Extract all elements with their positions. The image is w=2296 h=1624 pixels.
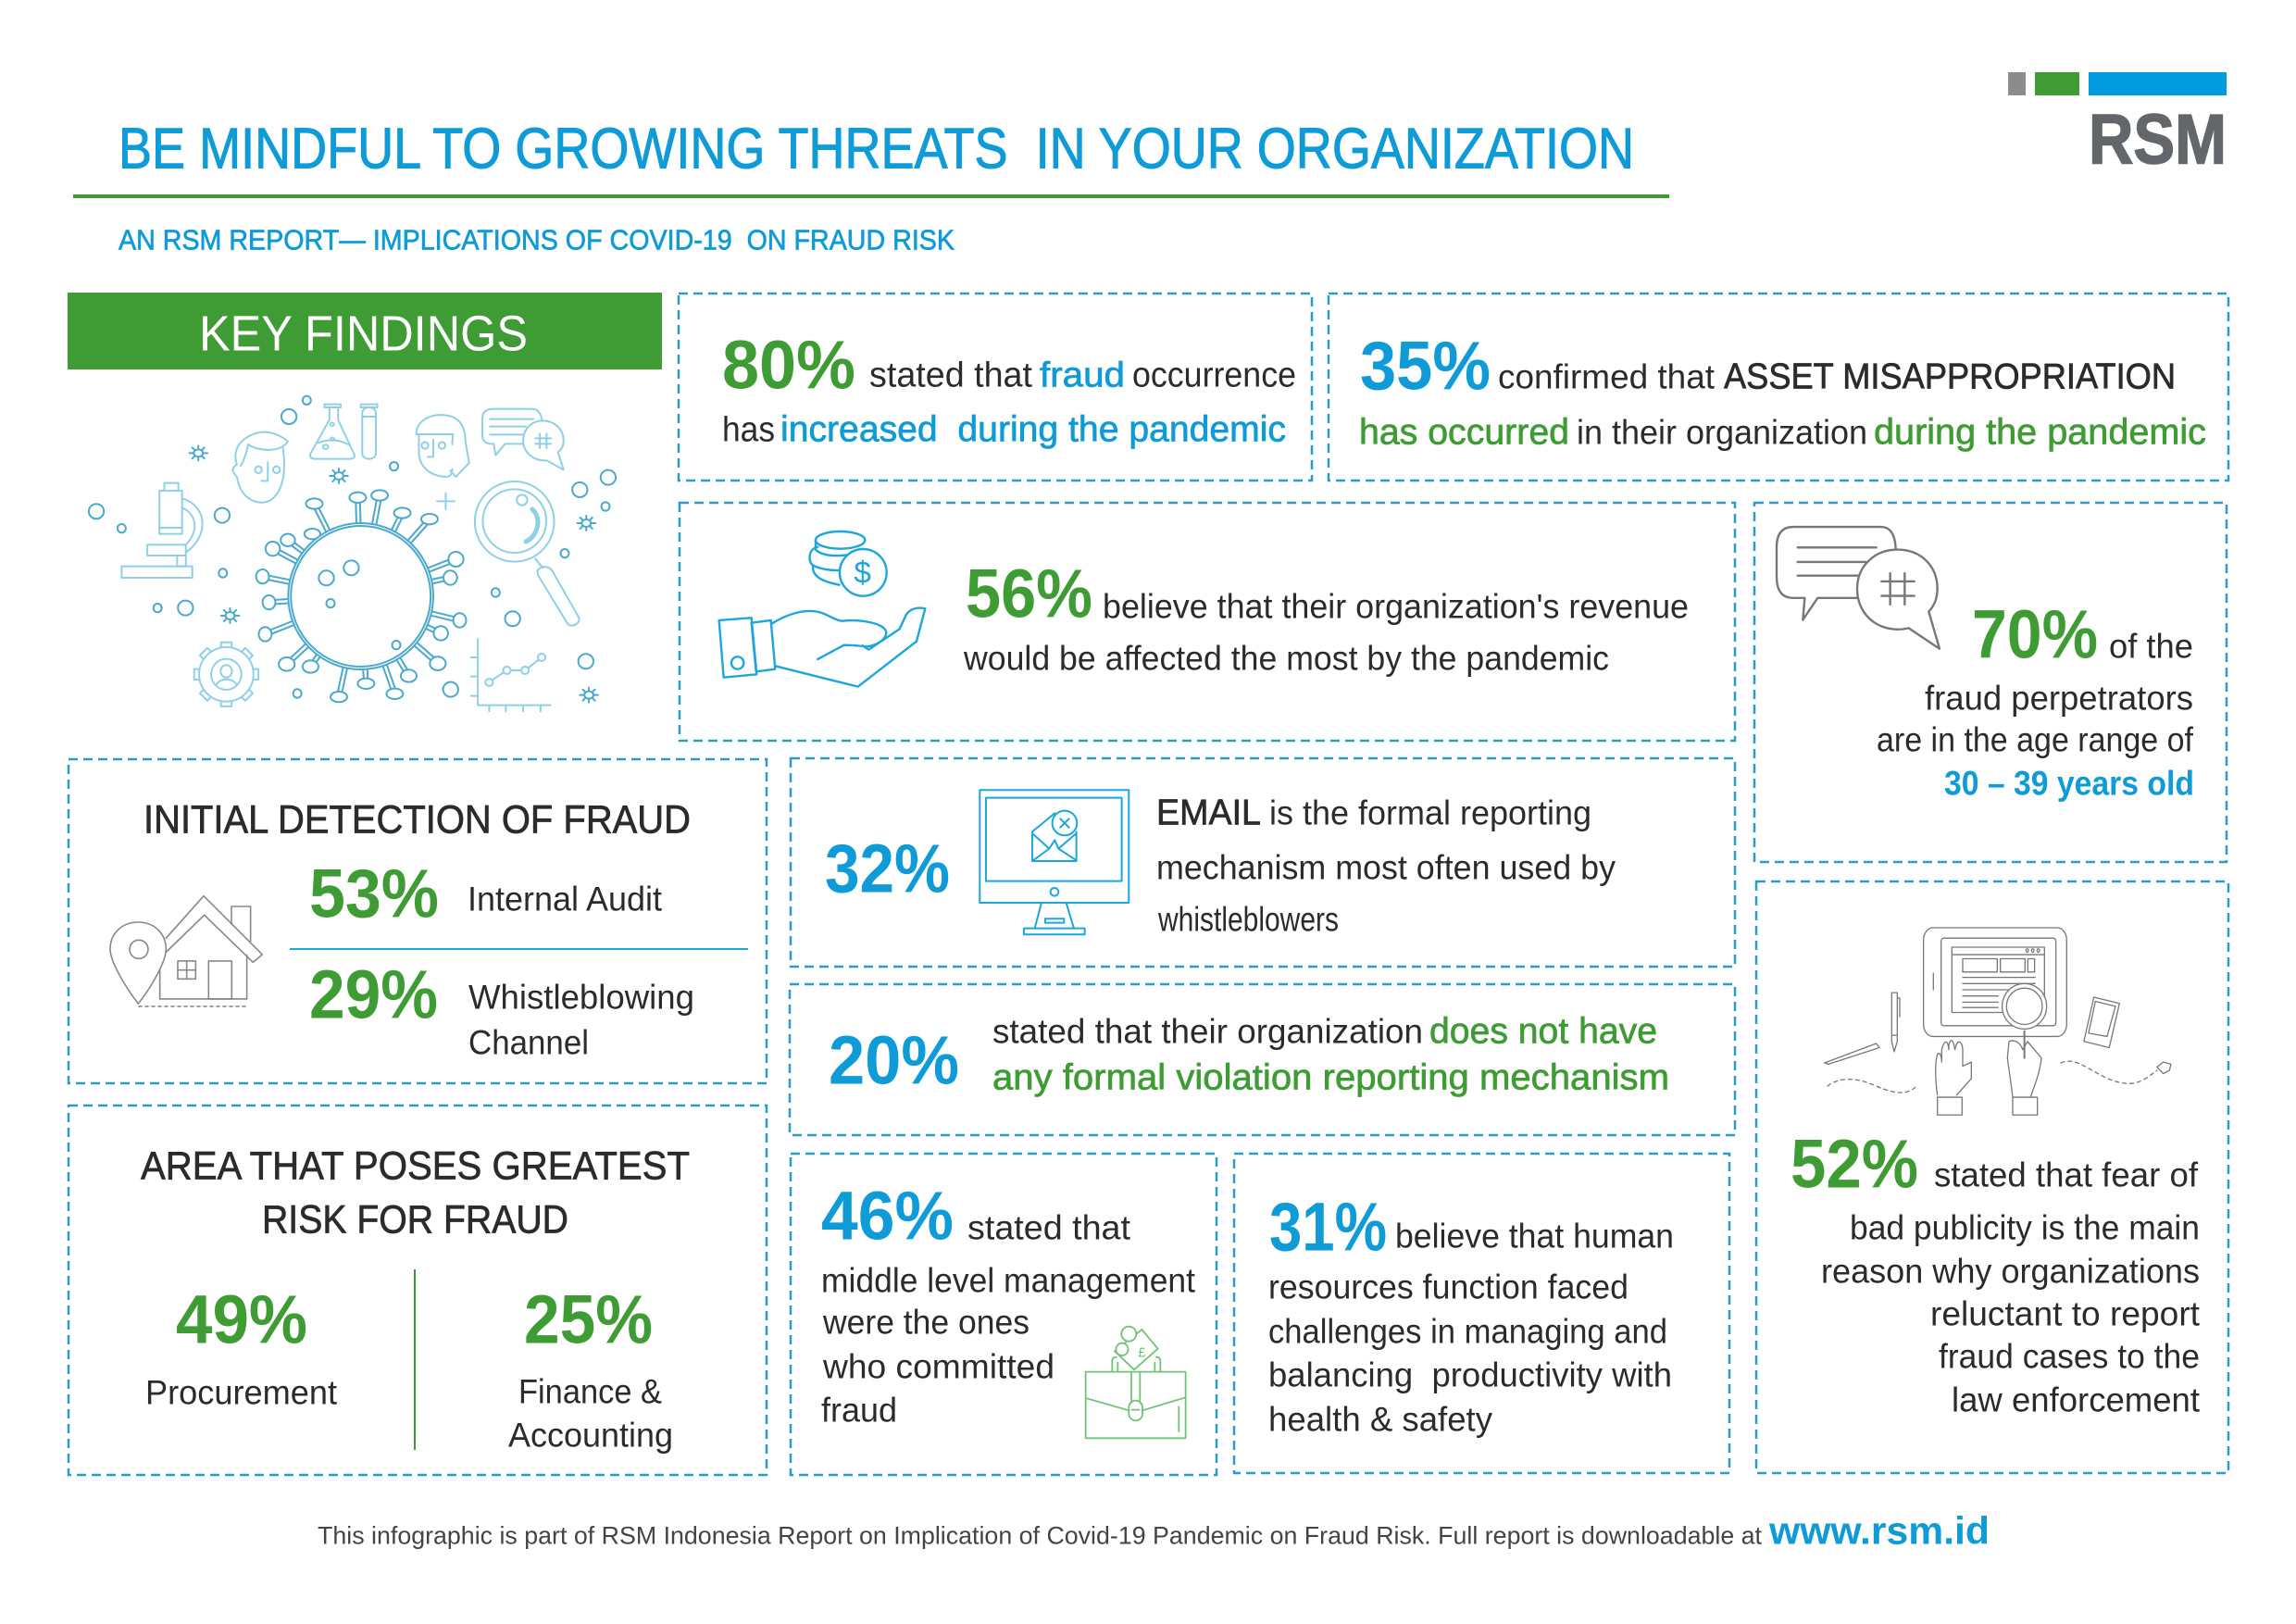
panel: 31%: balancing productivity with — [1268, 1355, 1672, 1394]
icon: house and location pin — [110, 896, 262, 1006]
footer note: This infographic is part of RSM Indonesia Report on Implication of Covid-19 Pandemic on Fraud Risk. Full report is downloadable at — [318, 1522, 1762, 1550]
panel: 56% — [680, 503, 1735, 741]
panel: 52%: stated that fear of — [1934, 1156, 2199, 1194]
panel: 80%: increased during the pandemic — [780, 409, 1286, 450]
icon: man face — [232, 432, 288, 503]
small particles — [89, 396, 616, 703]
footer note: www.rsm.id — [1768, 1509, 1990, 1552]
panel: area that poses greatest risk: 25% — [524, 1281, 653, 1357]
icon: microscope — [121, 483, 203, 578]
icon: hand holding coins: $ — [854, 556, 871, 590]
panel: area that poses greatest risk: Procurement — [145, 1374, 338, 1411]
panel: 80%: 80% — [722, 326, 855, 404]
panel: 52%: fraud cases to the — [1939, 1337, 2200, 1376]
panel: 46%: fraud — [821, 1391, 897, 1430]
panel: 70%: of the — [2109, 628, 2193, 665]
panel: 80%: occurrence — [1132, 356, 1296, 394]
panel: 56%: would be affected the most by the pandemic — [963, 639, 1609, 678]
panel: 32% email: is the formal reporting — [1269, 794, 1591, 831]
icon: briefcase with money — [1086, 1327, 1186, 1438]
panel: area that poses greatest risk: RISK FOR FRAUD — [262, 1198, 568, 1243]
heading: AREA THAT POSES GREATEST — [141, 1144, 690, 1189]
panel: 35%: during the pandemic — [1874, 413, 2206, 452]
panel: 35%: ASSET MISAPPROPRIATION — [1724, 357, 2176, 396]
panel: area that poses greatest risk: 49% — [176, 1281, 307, 1357]
panel: 46%: 46% — [821, 1178, 954, 1254]
icon: woman face — [417, 415, 469, 477]
icon: briefcase with money: £ — [1138, 1345, 1145, 1360]
icon: tablet, hands and magnifier — [1825, 928, 2171, 1115]
panel: 32% email: 32% — [825, 830, 950, 907]
panel: 20%: does not have — [1429, 1011, 1657, 1052]
panel: initial detection of fraud: Whistleblowing — [468, 978, 694, 1017]
panel: area that poses greatest risk: Finance & — [518, 1372, 662, 1411]
icon: monitor with envelope — [980, 790, 1129, 934]
panel: 52%: reason why organizations — [1821, 1252, 2200, 1291]
panel: 31%: resources function faced — [1268, 1268, 1628, 1305]
panel: initial detection of fraud — [69, 759, 767, 1083]
panel: 20% — [790, 984, 1735, 1135]
panel: 46%: stated that — [967, 1209, 1131, 1246]
panel: initial detection of fraud: 29% — [309, 956, 438, 1033]
panel: 20%: 20% — [829, 1022, 959, 1098]
title underline — [73, 194, 1669, 198]
panel: 56%: believe that their organization's revenue — [1103, 587, 1689, 626]
panel: 52%: bad publicity is the main — [1850, 1209, 2200, 1246]
icon: hand holding coins — [719, 531, 925, 687]
panel: initial detection of fraud: 53% — [309, 856, 439, 931]
key findings banner: KEY FINDINGS — [199, 306, 528, 361]
panel: 46% — [791, 1154, 1217, 1475]
icon: gear with person — [194, 643, 258, 706]
title: BE MINDFUL TO GROWING THREATS IN YOUR ORGANIZATION — [119, 117, 1634, 181]
panel: 32% email: whistleblowers — [1157, 900, 1339, 939]
panel: 31%: health & safety — [1268, 1400, 1492, 1439]
panel: 70%: 70% — [1972, 596, 2098, 672]
panel: 35%: 35% — [1360, 328, 1491, 404]
icon: chat bubbles — [482, 409, 564, 469]
panel: 80% — [679, 294, 1312, 481]
panel: area that poses greatest risk: Accounting — [508, 1417, 673, 1454]
panel: 70%: 30 – 39 years old — [1944, 765, 2194, 802]
icon: magnifying glass — [475, 481, 579, 626]
RSM logo: RSM — [2089, 100, 2227, 180]
panel: 52%: reluctant to report — [1930, 1294, 2201, 1333]
subtitle: AN RSM REPORT— IMPLICATIONS OF COVID-19 ON FRAUD RISK — [119, 224, 955, 256]
icon: speech bubbles — [1777, 527, 1940, 649]
panel: 52%: 52% — [1791, 1126, 1918, 1202]
icon: virus — [256, 490, 466, 702]
panel: 20%: stated that their organization — [992, 1013, 1423, 1050]
panel: 80%: stated that — [869, 356, 1032, 394]
panel: 80%: has — [722, 411, 775, 450]
icon: line chart — [471, 639, 550, 711]
key findings banner — [68, 293, 662, 369]
panel: 20%: any formal violation reporting mechanism — [992, 1057, 1669, 1098]
illustration: virus and laboratory icons — [89, 396, 616, 711]
panel: initial detection of fraud: Channel — [468, 1024, 589, 1061]
panel: 31%: challenges in managing and — [1268, 1313, 1667, 1350]
RSM logo — [2008, 72, 2227, 180]
panel: 35%: confirmed that — [1498, 357, 1716, 396]
footer note — [318, 1509, 1990, 1552]
panel: 31%: 31% — [1269, 1189, 1387, 1265]
panel: 32% email — [791, 758, 1735, 967]
panel: 70% — [1754, 503, 2227, 862]
panel: 31%: believe that human — [1395, 1217, 1674, 1255]
panel: area that poses greatest risk — [69, 1106, 767, 1475]
panel: 31% — [1234, 1154, 1729, 1473]
panel: 35%: in their organization — [1577, 413, 1867, 452]
panel: 35%: has occurred — [1359, 413, 1569, 452]
icon: flask and test tube — [310, 405, 378, 459]
panel: initial detection of fraud: Internal Audit — [468, 880, 663, 918]
panel: 80%: fraud — [1040, 356, 1125, 394]
panel: 46%: who committed — [822, 1348, 1054, 1385]
heading: INITIAL DETECTION OF FRAUD — [144, 798, 691, 843]
panel: 32% email: EMAIL — [1156, 793, 1261, 833]
panel: 52%: law enforcement — [1952, 1381, 2201, 1418]
panel: 46%: middle level management — [821, 1261, 1196, 1300]
panel: 70%: are in the age range of — [1877, 720, 2194, 759]
panel: 52% — [1756, 881, 2228, 1473]
panel: 32% email: mechanism most often used by — [1156, 848, 1616, 887]
panel: 46%: were the ones — [822, 1304, 1029, 1341]
panel: 70%: fraud perpetrators — [1925, 680, 2193, 717]
panel: 35% — [1329, 294, 2228, 481]
panel: 56%: 56% — [966, 556, 1092, 631]
